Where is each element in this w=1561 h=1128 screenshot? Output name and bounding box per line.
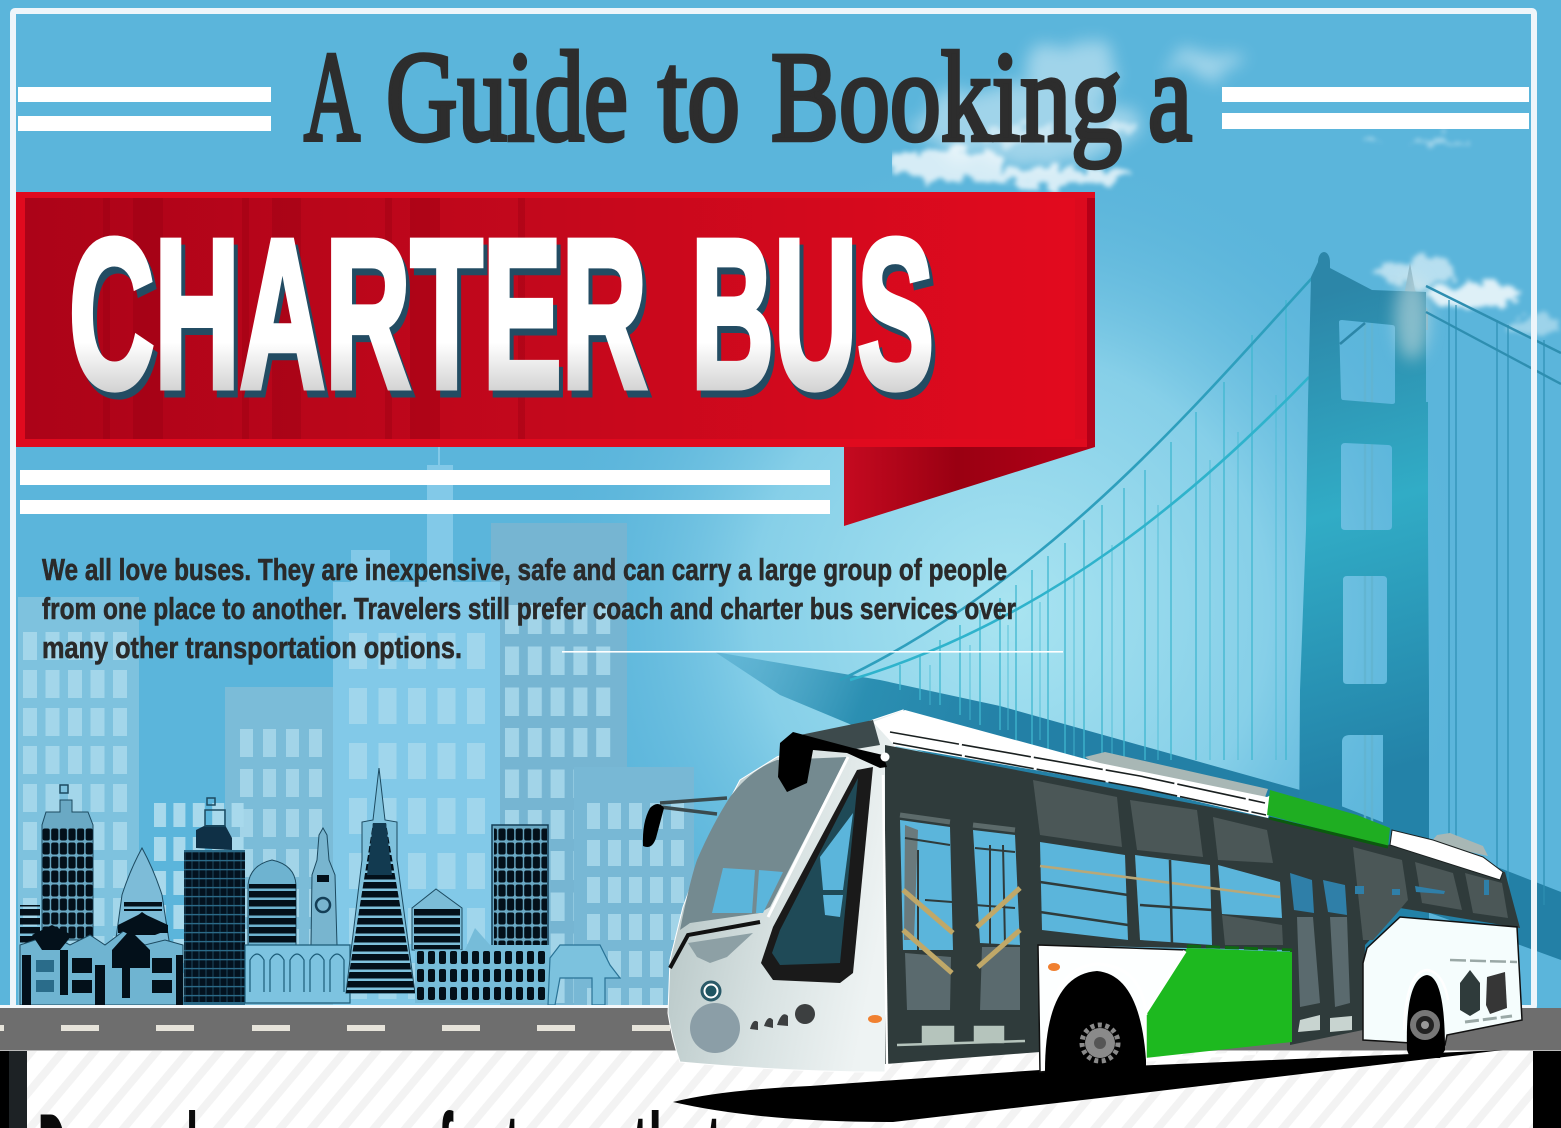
- windshield glass: [712, 868, 783, 913]
- white front side panel: [1038, 945, 1187, 1072]
- thin rule: [562, 651, 1063, 653]
- green side panel: [1145, 948, 1292, 1058]
- rear roof: [1390, 830, 1503, 880]
- bus: [643, 710, 1522, 1122]
- title: Guide: [386, 26, 628, 168]
- rule below banner: [20, 470, 830, 514]
- tower two: [184, 798, 245, 1005]
- headlights: [690, 982, 740, 1053]
- tower one: [42, 785, 93, 940]
- dark side panel: [885, 745, 1520, 1064]
- ground shadow: [673, 1050, 1503, 1122]
- rear grille and lights: [1450, 960, 1517, 1022]
- domed building: [248, 860, 296, 945]
- building: far left: [18, 597, 139, 1008]
- banner heading: BUS: [691, 195, 934, 432]
- Golden Gate bridge: [715, 252, 1561, 1008]
- rear window sky glints: [1355, 880, 1489, 895]
- side window panes upper: [1033, 780, 1508, 940]
- orange marker lights: [868, 963, 1060, 1023]
- intro paragraph: [42, 552, 1016, 665]
- main cables left span: [840, 278, 1312, 680]
- bridge deck: [715, 652, 1561, 960]
- main cables right span: [1426, 286, 1561, 384]
- roof front shadow: [800, 720, 880, 750]
- building: low block: [225, 687, 335, 1008]
- green roof section: [1267, 790, 1390, 847]
- section heading, cropped by page edge: [38, 1089, 722, 1128]
- strut in tower opening: [1340, 323, 1365, 344]
- banner heading shadow: CHARTER: [73, 202, 651, 439]
- large mirror housing: [778, 732, 887, 792]
- ferry clock tower: [311, 828, 337, 945]
- banner heading shadow: BUS: [695, 202, 938, 439]
- red banner: [16, 192, 1095, 526]
- building: window cluster: [154, 803, 249, 1008]
- victorian row: [20, 912, 183, 1005]
- intro paragraph: from one place to another. Travelers still prefer coach and charter bus services over: [42, 591, 1016, 626]
- banner body: [16, 192, 1095, 447]
- suspender cables left span: [900, 300, 1286, 760]
- transamerica pyramid: [346, 768, 415, 993]
- white rear side panel: [1363, 917, 1522, 1045]
- title: [304, 26, 1192, 168]
- title rule right: [1222, 87, 1529, 129]
- banner fold: [844, 447, 1095, 526]
- rear wheel: [1404, 970, 1448, 1058]
- front door panes: [883, 775, 1025, 1068]
- background city buildings: [18, 447, 694, 1008]
- rear door: [1290, 873, 1352, 1032]
- lane markings: [0, 1025, 670, 1031]
- San Francisco skyline: [20, 768, 620, 1005]
- side window sky panes lower: [1040, 842, 1282, 945]
- clouds: [895, 42, 1559, 335]
- pagoda gate: [548, 945, 620, 1005]
- front body: [668, 710, 903, 1072]
- roof white band: [873, 710, 1275, 818]
- title: A: [304, 26, 360, 168]
- lower side panels: [1038, 917, 1522, 1072]
- windshield upper surround: [680, 757, 847, 930]
- side mirror: [643, 798, 727, 847]
- intro paragraph: We all love buses. They are inexpensive, safe and can carry a large group of people: [42, 552, 1007, 587]
- low block left: [20, 905, 40, 1005]
- near tower: [1298, 252, 1429, 1008]
- lower section with diagonal stripes: [0, 1050, 1561, 1128]
- lower rear pane: [1222, 915, 1283, 945]
- road: [0, 1005, 1561, 1051]
- tower glare: [1395, 276, 1429, 360]
- tiered building: [412, 889, 462, 950]
- building: grey tower: [491, 523, 627, 1008]
- title: Booking: [771, 26, 1122, 168]
- far tower: [1405, 263, 1428, 330]
- suspenders seen through tower: [1365, 323, 1372, 1008]
- building: central tower with spire: [333, 447, 500, 1008]
- low row building: [415, 928, 550, 1003]
- banner heading: CHARTER: [69, 195, 647, 432]
- title: to: [658, 26, 740, 168]
- window bars: [1040, 860, 1280, 945]
- wiper area: [670, 922, 760, 968]
- front wheel: [1043, 964, 1146, 1080]
- intro paragraph: many other transportation options.: [42, 630, 462, 665]
- arcade: [245, 945, 350, 1003]
- secondary suspenders: [930, 395, 1276, 760]
- black side bars: [0, 1050, 1561, 1128]
- title: a: [1148, 26, 1192, 168]
- capitol dome: [113, 848, 172, 960]
- tower three: [492, 825, 548, 950]
- title rule left: [18, 87, 271, 131]
- side cab window frame: [761, 757, 873, 983]
- roof equipment: [1085, 752, 1488, 856]
- front logo: [750, 1004, 815, 1030]
- building: right block: [574, 767, 694, 1008]
- suspender cables right span: [1449, 300, 1544, 905]
